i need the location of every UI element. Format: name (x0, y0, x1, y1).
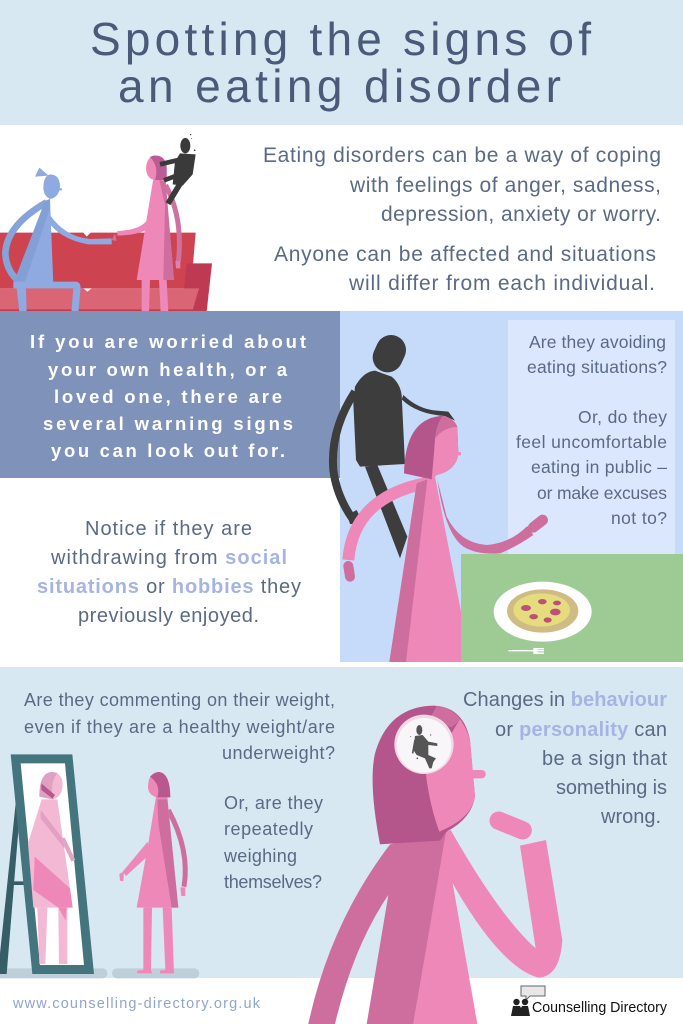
woman figure (348, 416, 543, 662)
logo: Counselling Directory: Counselling Directory (532, 1000, 668, 1016)
illustration: couple on sofa with shadow figure (0, 134, 212, 312)
text: avoiding eating situations: not to? (611, 508, 667, 528)
warning signs text: If you are worried about (30, 331, 306, 352)
text: changes in behaviour or personality: wrong. (600, 806, 661, 828)
text: changes in behaviour or personality: Changes in behaviour (463, 689, 667, 711)
text: avoiding eating situations: Are they avoiding (529, 332, 666, 352)
text: changes in behaviour or personality: or personality can (495, 719, 667, 741)
text: commenting on weight: repeatedly (224, 819, 313, 839)
warning signs text: you can look out for. (51, 440, 285, 461)
text: commenting on weight: themselves? (224, 872, 322, 892)
text: avoiding eating situations (516, 332, 667, 528)
title (90, 13, 591, 112)
icon: pizza plate (494, 582, 592, 654)
text: changes in behaviour or personality: something is (556, 777, 667, 799)
intro text block: Eating disorders can be a way of coping (263, 144, 661, 167)
panel: title band (0, 0, 683, 125)
mirror (0, 754, 94, 974)
warning signs text: several warning signs (43, 413, 293, 434)
intro text block (263, 144, 661, 295)
blue seated figure (5, 168, 117, 312)
intro text block: depression, anxiety or worry. (381, 203, 661, 226)
footer url: www.counselling-directory.org.uk (12, 996, 261, 1012)
text: avoiding eating situations: Or, do they (578, 407, 667, 427)
warning signs text: your own health, or a (48, 359, 288, 380)
panel: warning signs intro (0, 311, 340, 478)
text: withdrawing from social situations (37, 518, 301, 627)
text: avoiding eating situations: feel uncomfortable (516, 432, 667, 452)
intro text block: will differ from each individual. (348, 272, 655, 295)
panel: bottom section (0, 667, 683, 978)
title: an eating disorder (118, 60, 561, 112)
logo: Counselling Directory (511, 986, 668, 1016)
shadow figure (333, 350, 455, 558)
intro text block: with feelings of anger, sadness, (349, 174, 661, 197)
illustration: woman looking in mirror (0, 754, 199, 978)
intro text block: Anyone can be affected and situations (274, 243, 656, 266)
title: Spotting the signs of (90, 13, 591, 65)
head (373, 706, 486, 844)
text: changes in behaviour or personality (463, 689, 667, 828)
text: withdrawing from social situations: situations or hobbies they (37, 576, 301, 598)
reflection (28, 772, 73, 964)
text: avoiding eating situations: or make excuses (537, 483, 667, 503)
hand (499, 821, 523, 830)
text: changes in behaviour or personality: be a sign that (542, 748, 667, 770)
black shadow figure on shoulder (160, 134, 196, 204)
text: withdrawing from social situations: withdrawing from social (50, 547, 287, 569)
text: commenting on weight: even if they are a healthy weight/are (24, 717, 335, 737)
illustration: thoughtful woman with figure in her head (308, 706, 562, 1024)
text: avoiding eating situations: eating in public – (531, 457, 667, 477)
text: commenting on weight: weighing (223, 846, 297, 866)
text: avoiding eating situations: eating situations? (527, 357, 667, 377)
panel: table scene (340, 311, 683, 662)
pink standing figure (117, 155, 180, 312)
warning signs text (30, 331, 306, 461)
text: withdrawing from social situations: Notice if they are (85, 518, 252, 540)
text: commenting on weight: Are they commenting on their weight, (24, 690, 335, 710)
warning signs text: loved one, there are (54, 386, 282, 407)
standing woman (119, 772, 185, 973)
text: withdrawing from social situations: previously enjoyed. (78, 605, 259, 627)
text: commenting on weight (24, 690, 335, 892)
illustration: woman at the table with shadow figure (333, 350, 543, 662)
body and arm (308, 830, 562, 1024)
text: commenting on weight: Or, are they (224, 793, 323, 813)
icon: small figure in thought (410, 725, 437, 768)
table with pizza (461, 554, 683, 662)
text: commenting on weight: underweight? (222, 743, 335, 763)
